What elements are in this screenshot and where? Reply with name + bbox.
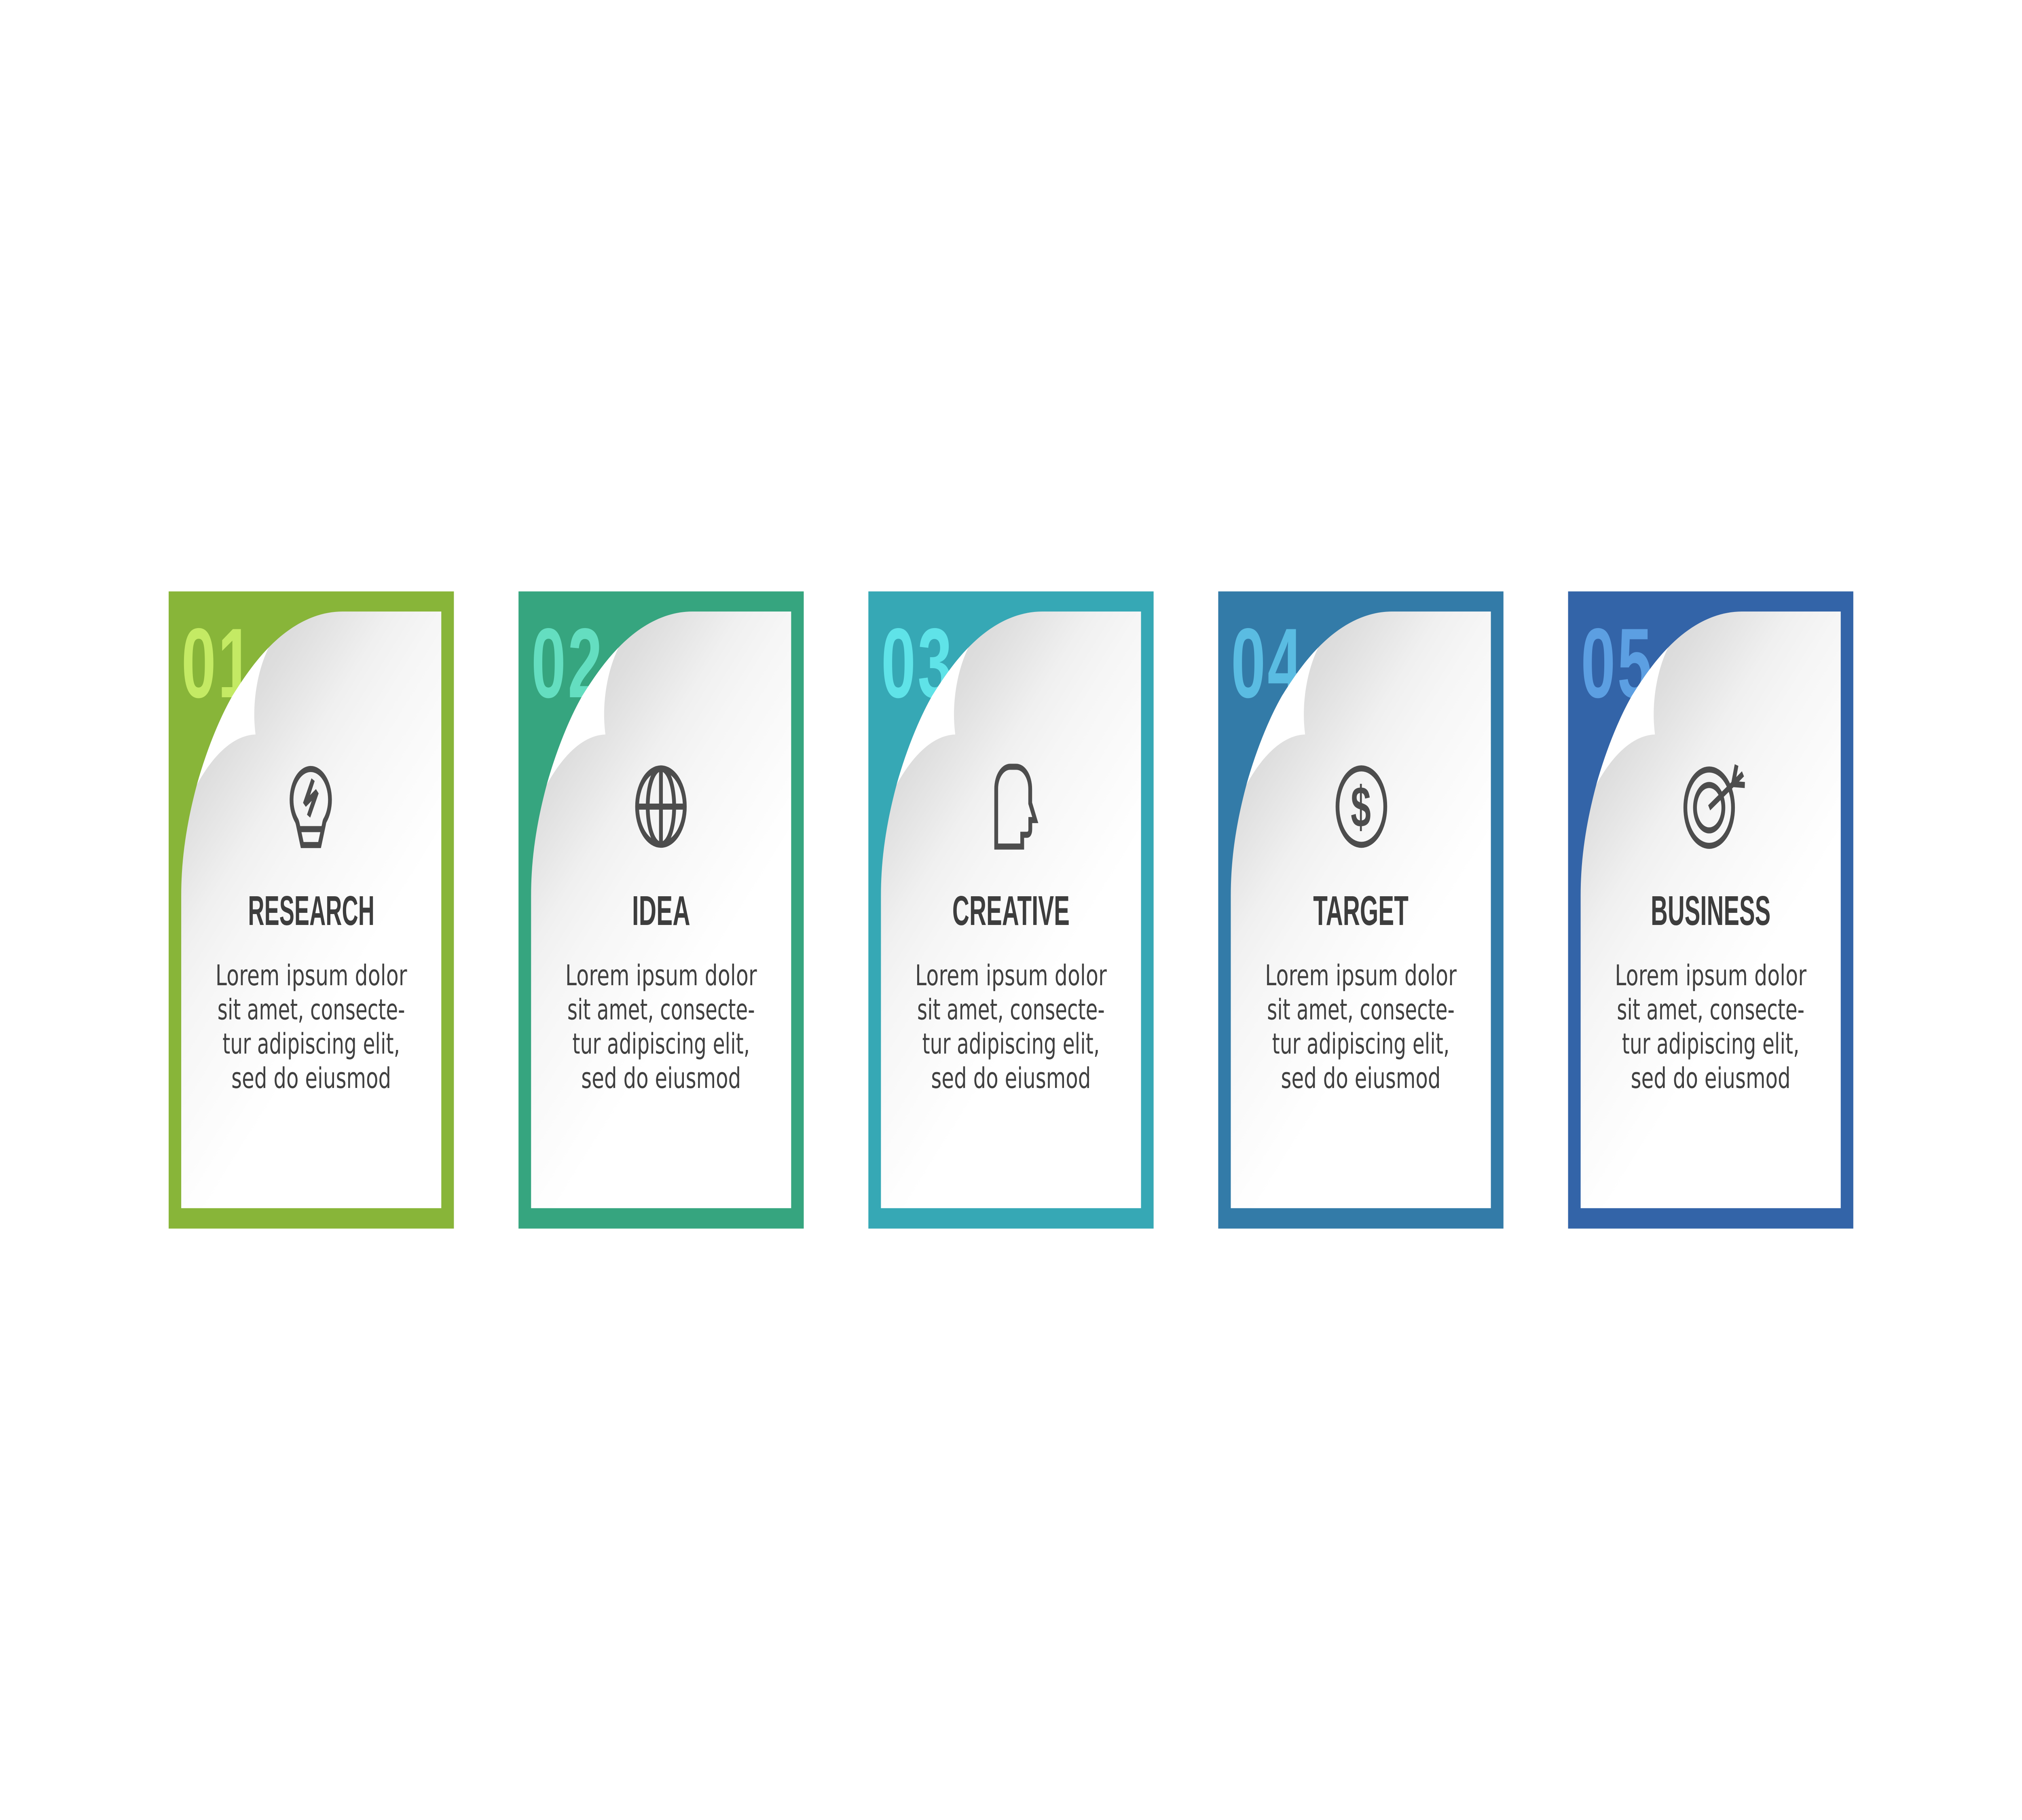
panel: idea [518, 591, 804, 1229]
number 04: 04 [1231, 608, 1304, 719]
body text: tur adipiscing elit, [572, 1027, 750, 1060]
frame [518, 591, 804, 1229]
panel: target [1218, 591, 1504, 1229]
icon: head profile [996, 767, 1035, 847]
body text [216, 959, 407, 1095]
frame [1568, 591, 1853, 1229]
icon: globe [637, 768, 685, 845]
body text: Lorem ipsum dolor [915, 959, 1107, 992]
page fold [1246, 648, 1318, 785]
body text: tur adipiscing elit, [922, 1027, 1100, 1060]
body text: Lorem ipsum dolor [1615, 959, 1806, 992]
curled page [181, 612, 441, 1208]
body text: sed do eiusmod [581, 1062, 741, 1095]
panel: creative [868, 591, 1154, 1229]
heading: RESEARCH [248, 888, 374, 934]
page fold [197, 648, 269, 785]
panel: research [169, 591, 454, 1229]
page fold [1596, 648, 1668, 785]
body text: sed do eiusmod [931, 1062, 1091, 1095]
icon: dollar coin: $ [1351, 775, 1371, 840]
body text: Lorem ipsum dolor [216, 959, 407, 992]
number 01: 01 [182, 608, 254, 719]
body text: sit amet, consecte- [1267, 993, 1455, 1026]
body text [1265, 959, 1457, 1095]
body text: sit amet, consecte- [218, 993, 405, 1026]
body text: Lorem ipsum dolor [565, 959, 757, 992]
curled page [531, 612, 791, 1208]
page fold [547, 648, 619, 785]
body text: tur adipiscing elit, [1272, 1027, 1449, 1060]
icon: light bulb [292, 769, 330, 845]
heading: TARGET [1313, 888, 1409, 934]
body text: sit amet, consecte- [567, 993, 755, 1026]
heading: CREATIVE [952, 888, 1070, 934]
heading: BUSINESS [1651, 888, 1770, 934]
body text: sit amet, consecte- [1617, 993, 1804, 1026]
body text [915, 959, 1107, 1095]
body text: tur adipiscing elit, [1622, 1027, 1800, 1060]
frame [1218, 591, 1504, 1229]
number 03: 03 [881, 608, 954, 719]
body text [1615, 959, 1806, 1095]
panel: business [1568, 591, 1853, 1229]
body text: sit amet, consecte- [917, 993, 1105, 1026]
page fold [897, 648, 969, 785]
body text: sed do eiusmod [231, 1062, 391, 1095]
body text: Lorem ipsum dolor [1265, 959, 1457, 992]
body text: sed do eiusmod [1631, 1062, 1791, 1095]
body text [565, 959, 757, 1095]
frame [868, 591, 1154, 1229]
number 02: 02 [531, 608, 604, 719]
heading: IDEA [632, 888, 690, 934]
curled page [881, 612, 1141, 1208]
body text: tur adipiscing elit, [222, 1027, 400, 1060]
icon: target with arrow [1685, 765, 1745, 846]
frame [169, 591, 454, 1229]
curled page [1231, 612, 1491, 1208]
icon: dollar coin [1337, 768, 1385, 845]
body text: sed do eiusmod [1281, 1062, 1441, 1095]
curled page [1581, 612, 1841, 1208]
number 05: 05 [1581, 608, 1654, 719]
